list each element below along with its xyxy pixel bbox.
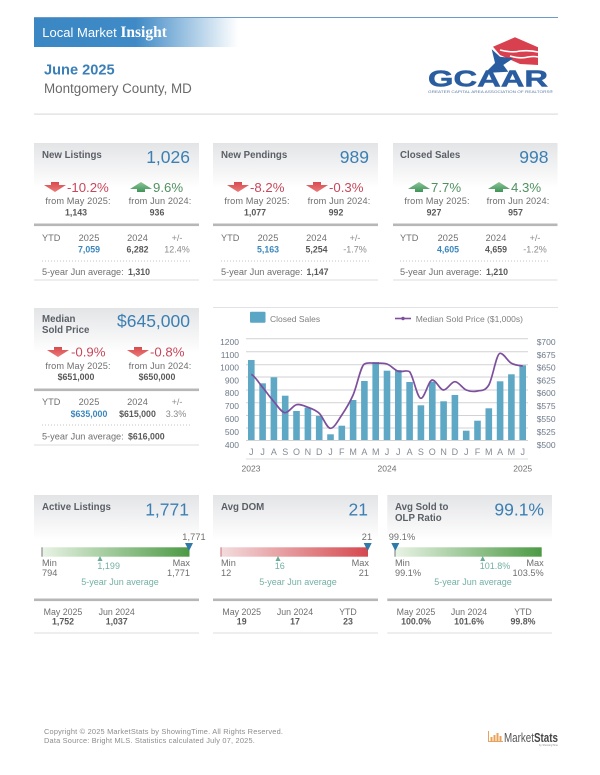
- panel: Median Sold Price: $650,000: [139, 372, 175, 382]
- panel: Median Sold Price: $615,000: [119, 409, 156, 419]
- panel: Avg Sold to OLP Ratio: 101.8%: [480, 561, 510, 571]
- bars: closed sales: [248, 360, 526, 440]
- panel: New Listings: +/-: [172, 233, 182, 243]
- panel: Closed Sales: 2025: [438, 233, 458, 243]
- panel: Avg Sold to OLP Ratio: [387, 495, 552, 634]
- panel: New Pendings: 2025: [258, 233, 278, 243]
- panel: Avg Sold to OLP Ratio: Max: [526, 558, 544, 568]
- panel: Median Sold Price: 5-year Jun average:: [42, 432, 124, 442]
- panel: Median Sold Price: 2025: [79, 397, 99, 407]
- left axis labels: 700: [225, 401, 239, 411]
- panel: Median Sold Price: Sold Price: [42, 325, 90, 336]
- legend: closed sales: [250, 312, 320, 324]
- panel: Median Sold Price: $635,000: [71, 409, 107, 419]
- right axis labels: $600: [537, 388, 556, 398]
- month labels: D: [452, 447, 459, 457]
- panel: New Pendings: 5,254: [305, 245, 328, 255]
- month labels: A: [407, 447, 413, 457]
- panel: New Listings: 2024: [127, 233, 148, 243]
- panel: Avg DOM: Jun 2024: [277, 607, 313, 617]
- panel: New Pendings: from May 2025:: [224, 196, 290, 206]
- panel: New Pendings: +/-: [350, 233, 360, 243]
- month labels: O: [429, 447, 436, 457]
- month labels: N: [305, 447, 311, 457]
- panel: Active Listings: 1,771: [167, 568, 190, 578]
- panel: Avg DOM: Avg DOM: [221, 502, 264, 513]
- panel: New Pendings: 5,163: [257, 245, 279, 255]
- left axis labels: 400: [225, 440, 239, 450]
- panel: New Pendings: [213, 143, 378, 280]
- panel: Avg Sold to OLP Ratio: 99.1%: [395, 568, 421, 578]
- legend: median sold price: Median Sold Price ($1,000s): [416, 314, 523, 324]
- panel: New Pendings: -8.2%: [250, 180, 285, 195]
- panel: New Pendings: 989: [340, 147, 369, 167]
- panel: Active Listings: 5-year Jun average: [81, 577, 159, 587]
- panel: Median Sold Price: from May 2025:: [45, 361, 111, 371]
- left axis labels: 1200: [220, 337, 239, 347]
- panel: Closed Sales: -1.2%: [523, 245, 547, 255]
- month labels: A: [361, 447, 367, 457]
- month labels: N: [440, 447, 447, 457]
- panel: Avg DOM: Min: [221, 558, 236, 568]
- logo: GCAAR: [428, 37, 553, 94]
- panel: New Listings: from Jun 2024:: [129, 196, 191, 206]
- panel: Median Sold Price: [34, 308, 199, 446]
- panel: Median Sold Price: $645,000: [117, 311, 190, 331]
- month labels: S: [418, 447, 424, 457]
- panel: New Listings: 5-year Jun average:: [42, 267, 124, 277]
- panel: Active Listings: Active Listings: [42, 502, 111, 513]
- panel: Closed Sales: 4.3%: [511, 180, 541, 195]
- panel: New Pendings: from Jun 2024:: [308, 196, 370, 206]
- panel: Avg DOM: 21: [349, 500, 368, 520]
- panel: Avg Sold to OLP Ratio: May 2025: [397, 607, 435, 617]
- header divider: [34, 114, 558, 115]
- panel: Active Listings: May 2025: [44, 607, 82, 617]
- panel: New Pendings: 1,077: [244, 208, 266, 218]
- month labels: A: [497, 447, 503, 457]
- panel: Active Listings: [34, 495, 206, 634]
- panel: New Pendings: YTD: [221, 233, 240, 243]
- panel: Avg Sold to OLP Ratio: 103.5%: [513, 568, 544, 578]
- panel: New Listings: 936: [150, 208, 164, 218]
- panel: Closed Sales: 998: [519, 147, 548, 167]
- panel: Avg DOM: 19: [237, 616, 247, 626]
- year labels: 2025: [513, 464, 532, 474]
- logo: MarketStats: MarketStats: [504, 731, 558, 745]
- left axis labels: 800: [225, 388, 239, 398]
- panel: New Listings: 12.4%: [164, 245, 190, 255]
- panel: New Listings: [34, 143, 199, 280]
- panel: Median Sold Price: +/-: [172, 397, 182, 407]
- right axis labels: $675: [537, 350, 556, 360]
- panel: Median Sold Price: 2024: [127, 397, 148, 407]
- panel: Closed Sales: 5-year Jun average:: [400, 267, 482, 277]
- panel: Avg Sold to OLP Ratio: 101.6%: [454, 616, 484, 626]
- month labels: A: [271, 447, 277, 457]
- chart: closed sales and median sold price: [213, 307, 558, 474]
- month labels: J: [520, 447, 525, 457]
- panel: Closed Sales: 4,605: [437, 245, 459, 255]
- panel: Closed Sales: +/-: [530, 233, 540, 243]
- panel: New Pendings: -1.7%: [343, 245, 367, 255]
- panel: Avg DOM: 17: [290, 616, 300, 626]
- month labels: S: [282, 447, 288, 457]
- panel: Avg Sold to OLP Ratio: 5-year Jun average: [434, 577, 512, 587]
- panel: Closed Sales: 4,659: [485, 245, 507, 255]
- panel: Avg DOM: 12: [221, 568, 231, 578]
- panel: Median Sold Price: YTD: [42, 397, 61, 407]
- panel: Closed Sales: from Jun 2024:: [487, 196, 549, 206]
- month labels: [249, 447, 525, 457]
- panel: Avg Sold to OLP Ratio: YTD: [514, 607, 532, 617]
- left axis labels: 1100: [221, 350, 239, 360]
- month labels: F: [475, 447, 481, 457]
- panel: New Listings: 1,026: [146, 147, 190, 167]
- right axis labels: $700: [537, 337, 556, 347]
- panel: New Listings: 1,143: [65, 208, 87, 218]
- panel: Avg Sold to OLP Ratio: Jun 2024: [451, 607, 487, 617]
- month labels: M: [508, 447, 515, 457]
- panel: Avg DOM: YTD: [339, 607, 357, 617]
- panel: Avg DOM: [213, 495, 378, 634]
- panel: New Pendings: 992: [329, 208, 343, 218]
- month labels: M: [372, 447, 379, 457]
- month labels: J: [396, 447, 401, 457]
- panel: New Listings: 9.6%: [153, 180, 183, 195]
- panel: Active Listings: 794: [42, 568, 57, 578]
- panel: New Listings: New Listings: [42, 150, 102, 161]
- panel: Closed Sales: 957: [508, 208, 523, 218]
- right axis labels: $625: [537, 376, 556, 386]
- right axis labels: $500: [537, 440, 556, 450]
- panel: Avg DOM: 5-year Jun average: [259, 577, 337, 587]
- year labels: 2024: [378, 464, 397, 474]
- right axis labels: $525: [537, 427, 556, 437]
- right axis labels: $550: [537, 414, 556, 424]
- panel: Closed Sales: 1,210: [486, 267, 508, 277]
- panel: Avg Sold to OLP Ratio: 99.1%: [389, 532, 415, 542]
- panel: Active Listings: Max: [173, 558, 190, 568]
- month labels: J: [260, 447, 265, 457]
- panel: Avg DOM: May 2025: [222, 607, 261, 617]
- panel: Median Sold Price: 3.3%: [166, 409, 186, 419]
- left axis labels: 600: [225, 414, 239, 424]
- footer copyright: Copyright © 2025 MarketStats by ShowingTime. All Rights Reserved.: [44, 727, 283, 736]
- left axis labels: [220, 337, 239, 450]
- left axis labels: 1000: [220, 362, 239, 372]
- panel: Closed Sales: [393, 143, 558, 280]
- panel: Active Listings: 1,771: [182, 532, 206, 542]
- line: median sold price: [251, 353, 523, 428]
- logo: MarketStats: [488, 731, 559, 747]
- panel: Closed Sales: 7.7%: [431, 180, 461, 195]
- panel: New Listings: -10.2%: [67, 180, 109, 195]
- month labels: J: [464, 447, 468, 457]
- panel: Avg Sold to OLP Ratio: OLP Ratio: [395, 513, 442, 524]
- year labels: 2023: [242, 464, 261, 474]
- panel: New Listings: 2025: [79, 233, 99, 243]
- header band: [34, 17, 558, 47]
- panel: Active Listings: 1,199: [97, 561, 120, 571]
- panel: New Listings: 1,310: [128, 267, 150, 277]
- panel: Avg Sold to OLP Ratio: Avg Sold to: [395, 502, 449, 513]
- footer copyright: Data Source: Bright MLS. Statistics calculated July 07, 2025.: [44, 736, 255, 745]
- panel: Avg Sold to OLP Ratio: Min: [395, 558, 410, 568]
- panel: Avg DOM: 21: [362, 532, 372, 542]
- panel: Active Listings: 1,752: [52, 616, 74, 626]
- footer copyright: [44, 727, 283, 745]
- month labels: O: [293, 447, 300, 457]
- panel: Avg DOM: 23: [343, 616, 353, 626]
- panel: Closed Sales: 927: [427, 208, 441, 218]
- panel: Avg Sold to OLP Ratio: 99.1%: [494, 500, 544, 520]
- report date: June 2025: [44, 62, 115, 78]
- legend: closed sales: Closed Sales: [270, 314, 320, 324]
- panel: Active Listings: 1,037: [106, 616, 128, 626]
- year labels: [242, 464, 532, 474]
- panel: Avg Sold to OLP Ratio: 100.0%: [401, 616, 431, 626]
- panel: Closed Sales: from May 2025:: [404, 196, 470, 206]
- panel: New Pendings: 1,147: [306, 267, 329, 277]
- panel: Avg DOM: 21: [359, 568, 369, 578]
- gridlines: [246, 339, 528, 440]
- panel: New Pendings: 2024: [306, 233, 327, 243]
- panel: New Listings: from May 2025:: [45, 196, 111, 206]
- panel: Median Sold Price: $651,000: [58, 372, 94, 382]
- panel: New Pendings: 5-year Jun average:: [221, 267, 303, 277]
- panel: Median Sold Price: from Jun 2024:: [129, 361, 191, 371]
- month labels: J: [328, 447, 333, 457]
- panel: Avg DOM: 16: [275, 561, 285, 571]
- month labels: D: [316, 447, 323, 457]
- month labels: M: [349, 447, 357, 457]
- panel: New Listings: 7,059: [78, 245, 100, 255]
- logo: GCAAR: GREATER CAPITAL AREA ASSOCIATION OF REALTORS®: [428, 89, 553, 94]
- left axis labels: 900: [225, 376, 239, 386]
- right axis labels: [537, 337, 556, 450]
- left axis labels: 500: [225, 427, 239, 437]
- panel: New Pendings: -0.3%: [329, 180, 364, 195]
- panel: Active Listings: Jun 2024: [99, 607, 135, 617]
- month labels: J: [385, 447, 389, 457]
- right axis labels: $575: [537, 401, 556, 411]
- month labels: M: [485, 447, 493, 457]
- panel: Median Sold Price: -0.8%: [150, 345, 185, 360]
- month labels: J: [249, 447, 254, 457]
- location: Montgomery County, MD: [44, 81, 192, 96]
- header band: Local Market Insight: [42, 24, 168, 41]
- panel: Avg DOM: Max: [352, 558, 369, 568]
- panel: Median Sold Price: $616,000: [128, 432, 165, 442]
- panel: Avg Sold to OLP Ratio: 99.8%: [511, 616, 536, 626]
- month labels: F: [339, 447, 345, 457]
- right axis labels: $650: [537, 362, 556, 372]
- logo: MarketStats: by ShowingTime: [539, 743, 559, 747]
- panel: New Listings: 6,282: [126, 245, 149, 255]
- panel: New Pendings: New Pendings: [221, 150, 287, 161]
- panel: Closed Sales: 2024: [486, 233, 506, 243]
- logo: GCAAR: GCAAR: [428, 66, 548, 92]
- panel: Closed Sales: Closed Sales: [400, 150, 460, 161]
- panel: Closed Sales: YTD: [400, 233, 419, 243]
- panel: Median Sold Price: -0.9%: [71, 345, 106, 360]
- panel: Active Listings: Min: [42, 558, 57, 568]
- panel: Median Sold Price: Median: [42, 314, 75, 325]
- panel: Active Listings: 1,771: [145, 500, 189, 520]
- panel: New Listings: YTD: [42, 233, 61, 243]
